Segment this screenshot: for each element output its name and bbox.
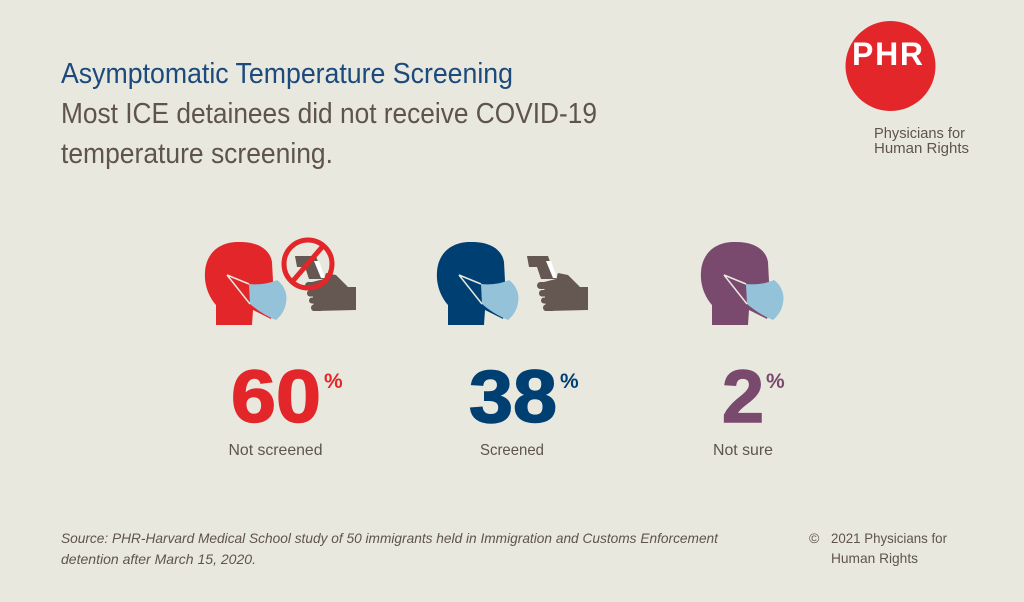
icon: blue head with mask, thermometer in hand — [437, 242, 588, 325]
stat: 60% not screened: Not screened — [228, 442, 322, 459]
logo: Physicians for Human Rights: Human Rights — [874, 141, 969, 157]
copyright — [809, 530, 947, 566]
source note: detention after March 15, 2020. — [61, 551, 256, 567]
stat: 38% screened — [469, 355, 579, 459]
stat: 2% not sure: Not sure — [713, 442, 773, 459]
stat: 38% screened: 38 — [469, 355, 557, 438]
icon: red head with mask, crossed-out thermometer — [205, 240, 356, 325]
copyright: © — [809, 530, 820, 546]
stat: 38% screened: Screened — [480, 442, 544, 459]
stat: 60% not screened: % — [324, 370, 343, 393]
icon: purple head with mask — [701, 242, 784, 325]
title: temperature screening. — [61, 138, 333, 170]
title: Asymptomatic Temperature Screening — [61, 58, 513, 90]
logo: Physicians for Human Rights: PHR — [852, 36, 923, 72]
source note: Source: PHR-Harvard Medical School study of 50 immigrants held in Immigration and Customs Enforcement — [61, 530, 719, 546]
stat: 2% not sure: % — [766, 370, 785, 393]
title — [61, 58, 597, 170]
logo: Physicians for Human Rights: Physicians for — [874, 126, 965, 142]
logo: Physicians for Human Rights — [846, 21, 969, 157]
stat: 60% not screened: 60 — [231, 355, 321, 438]
stat: 60% not screened — [228, 355, 343, 459]
copyright: 2021 Physicians for — [831, 530, 947, 546]
stat: 2% not sure — [713, 355, 785, 459]
stat: 2% not sure: 2 — [722, 355, 764, 438]
source note — [61, 530, 719, 567]
stat: 38% screened: % — [560, 370, 579, 393]
copyright: Human Rights — [831, 550, 918, 566]
title: Most ICE detainees did not receive COVID-19 — [61, 98, 597, 130]
